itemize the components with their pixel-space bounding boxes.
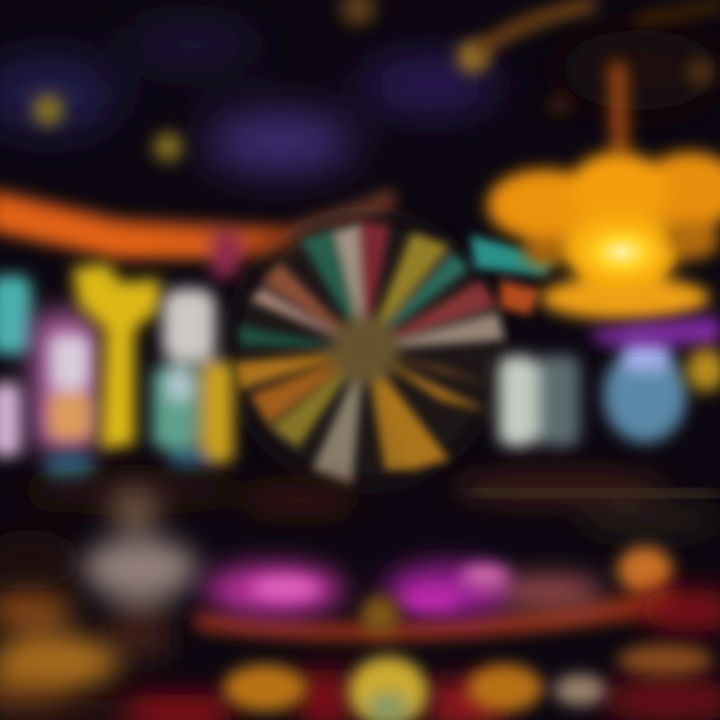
chandelier chain bbox=[480, 5, 720, 150]
figure bbox=[82, 488, 198, 660]
slot machine: pink bbox=[32, 312, 98, 452]
table orange end bbox=[617, 546, 673, 594]
slot machine: yellow bbox=[72, 262, 160, 450]
chandelier body bbox=[487, 152, 720, 320]
counter rail bbox=[470, 490, 720, 496]
roulette table bbox=[195, 546, 680, 642]
wheel bbox=[230, 215, 505, 485]
bottom stools bbox=[223, 644, 713, 720]
table highlights bbox=[251, 564, 509, 610]
slot machine: white grey bbox=[498, 355, 580, 447]
lower dark red floor haze bbox=[0, 472, 720, 590]
table magenta felt bbox=[205, 564, 605, 616]
bottom red carpet bbox=[0, 588, 720, 720]
teal ribbon bbox=[470, 235, 555, 315]
yellow accent bbox=[686, 348, 720, 392]
wheel backing bbox=[230, 215, 500, 485]
slot machine: white and green bbox=[152, 288, 234, 470]
purple band bbox=[590, 315, 720, 345]
wheel spokes bbox=[236, 222, 505, 485]
center post bbox=[360, 595, 400, 635]
slot machine: pink screens bbox=[44, 335, 96, 482]
slot machines right bbox=[498, 315, 720, 447]
chandelier glow bbox=[564, 214, 680, 290]
slot machine: blue bbox=[603, 335, 687, 443]
slot machines left bbox=[0, 262, 234, 482]
chandelier bbox=[487, 152, 720, 320]
table edge bbox=[195, 588, 680, 642]
slot machine: cyan bbox=[0, 275, 32, 457]
ceiling lights bbox=[32, 0, 714, 162]
orange band bbox=[0, 188, 395, 278]
bottom left orange seats bbox=[0, 592, 120, 706]
wheel hub bbox=[331, 316, 399, 384]
ceiling: purple haze bbox=[0, 19, 720, 172]
